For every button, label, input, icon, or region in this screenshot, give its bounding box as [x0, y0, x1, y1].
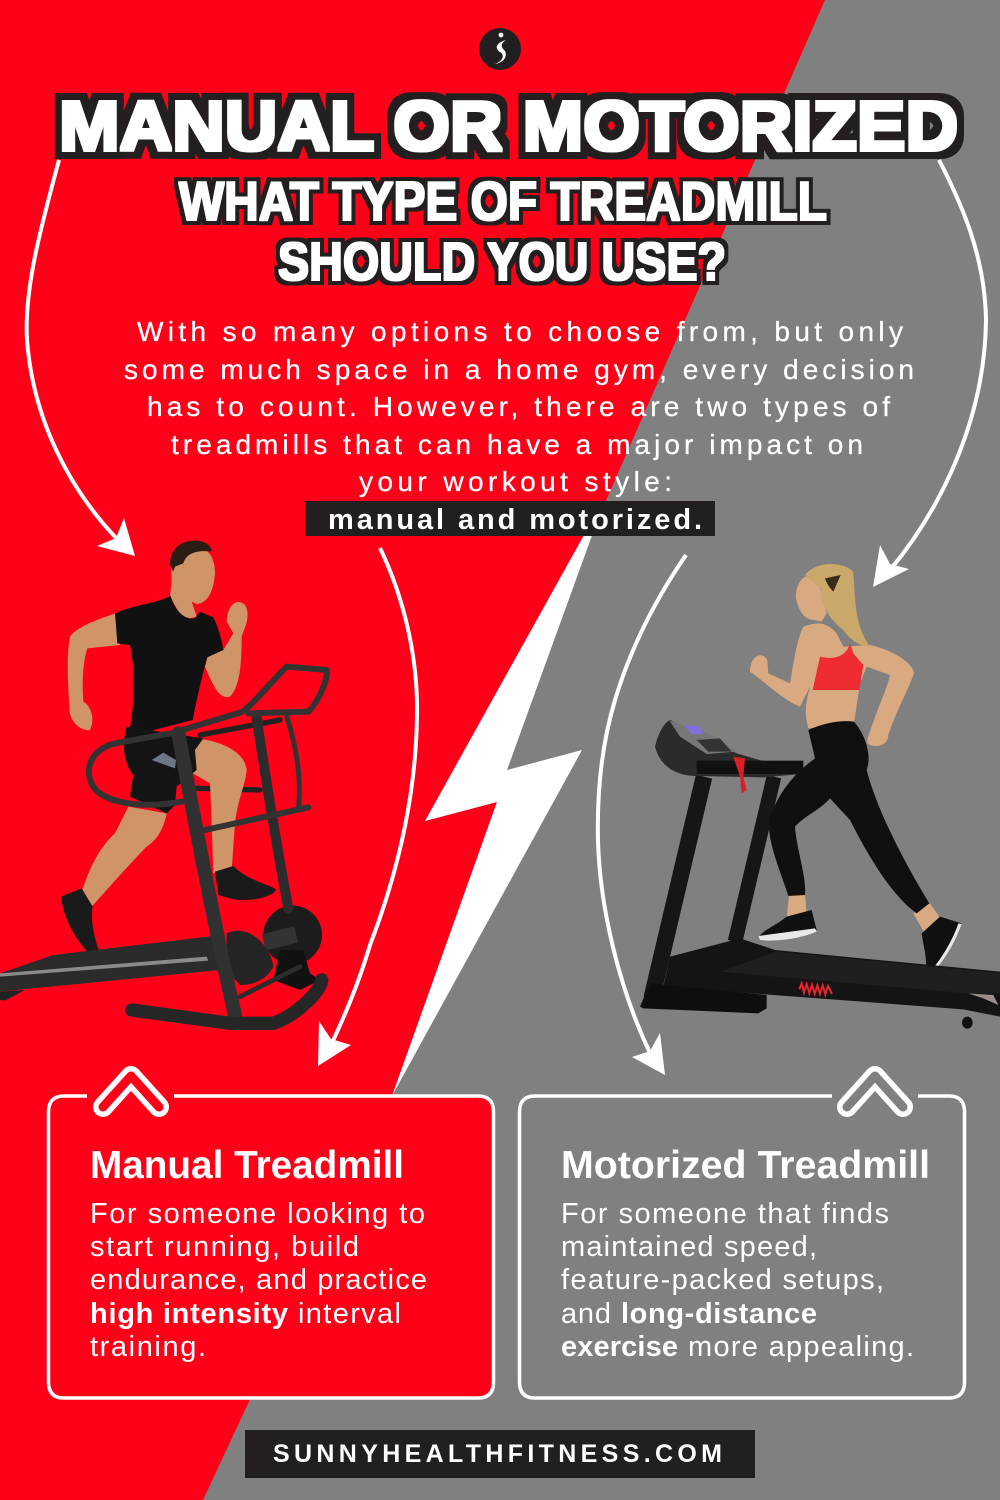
illustration: man on manual treadmill [0, 541, 327, 1023]
title: MANUAL OR MOTORIZED [59, 87, 958, 165]
lightning bolt divider [392, 530, 594, 1096]
woman leggings [769, 721, 929, 913]
intro paragraph [124, 316, 914, 497]
treadmill deck [0, 936, 220, 1001]
panel body text: and [561, 1298, 611, 1330]
treadmill red spring detail [799, 983, 832, 995]
runner skin [68, 547, 248, 907]
shorts accent [152, 753, 176, 768]
intro paragraph: some much space in a home gym, every decision [124, 354, 914, 385]
runner shorts [124, 727, 203, 813]
logo badge [479, 28, 521, 70]
woman hair [805, 564, 870, 647]
hair shadow [825, 575, 841, 592]
arrow: top right curve [873, 160, 986, 587]
treadmill frame [89, 667, 327, 1023]
panel: manual treadmill [48, 1076, 494, 1398]
intro paragraph: has to count. However, there are two types of [147, 391, 890, 422]
panel heading: Motorized Treadmill [561, 1144, 930, 1187]
website footer bar [245, 1430, 755, 1478]
intro paragraph: your workout style: [359, 466, 672, 497]
panel body text: start running, build [90, 1231, 359, 1263]
treadmill console [655, 720, 803, 793]
treadmill uprights [652, 777, 774, 998]
panel border [48, 1096, 494, 1398]
runner shoes [61, 866, 276, 953]
website footer bar: SUNNYHEALTHFITNESS.COM [273, 1440, 722, 1468]
panel body text: training. [90, 1331, 206, 1363]
woman skin [750, 575, 942, 937]
intro paragraph: With so many options to choose from, but only [137, 316, 903, 347]
arrow: middle right curve [598, 555, 686, 1075]
panel body text: exercise [561, 1331, 678, 1363]
panel body text: For someone looking to [90, 1198, 425, 1230]
panel body text: interval [298, 1298, 401, 1330]
treadmill flywheels [227, 906, 322, 990]
icon: chevron up [87, 1076, 174, 1125]
panel body text: maintained speed, [561, 1231, 817, 1263]
icon: chevron up [832, 1076, 918, 1125]
subtitle line 2: SHOULD YOU USE? [278, 232, 726, 292]
illustration: woman on motorized treadmill [640, 564, 1000, 1029]
panel border [520, 1096, 964, 1398]
highlighted phrase: manual and motorized. [328, 504, 702, 536]
panel body text [561, 1198, 914, 1363]
arrow: middle left curve [318, 548, 417, 1066]
intro paragraph: treadmills that can have a major impact on [171, 429, 863, 460]
panel body text: For someone that finds [561, 1198, 889, 1230]
panel box [48, 1096, 494, 1398]
background: gray side [203, 0, 1000, 1500]
treadmill deck and base [640, 938, 1000, 1029]
runner shirt [115, 596, 223, 737]
runner hair [170, 541, 212, 572]
panel body text: feature-packed setups, [561, 1264, 884, 1296]
treadmill rear rails behind runner [197, 720, 280, 790]
arrow: top left curve [27, 160, 135, 556]
subtitle line 1: WHAT TYPE OF TREADMILL [179, 170, 827, 232]
panel heading: Manual Treadmill [90, 1144, 404, 1187]
panel body text: endurance, and practice [90, 1264, 427, 1296]
panel body text: more appealing. [688, 1331, 914, 1363]
panel body text: high intensity [90, 1298, 288, 1330]
woman shoes [758, 910, 962, 978]
panel body text: long-distance [621, 1298, 817, 1330]
woman sports top [813, 643, 863, 690]
panel body text [90, 1198, 427, 1363]
panel: motorized treadmill [520, 1076, 964, 1398]
